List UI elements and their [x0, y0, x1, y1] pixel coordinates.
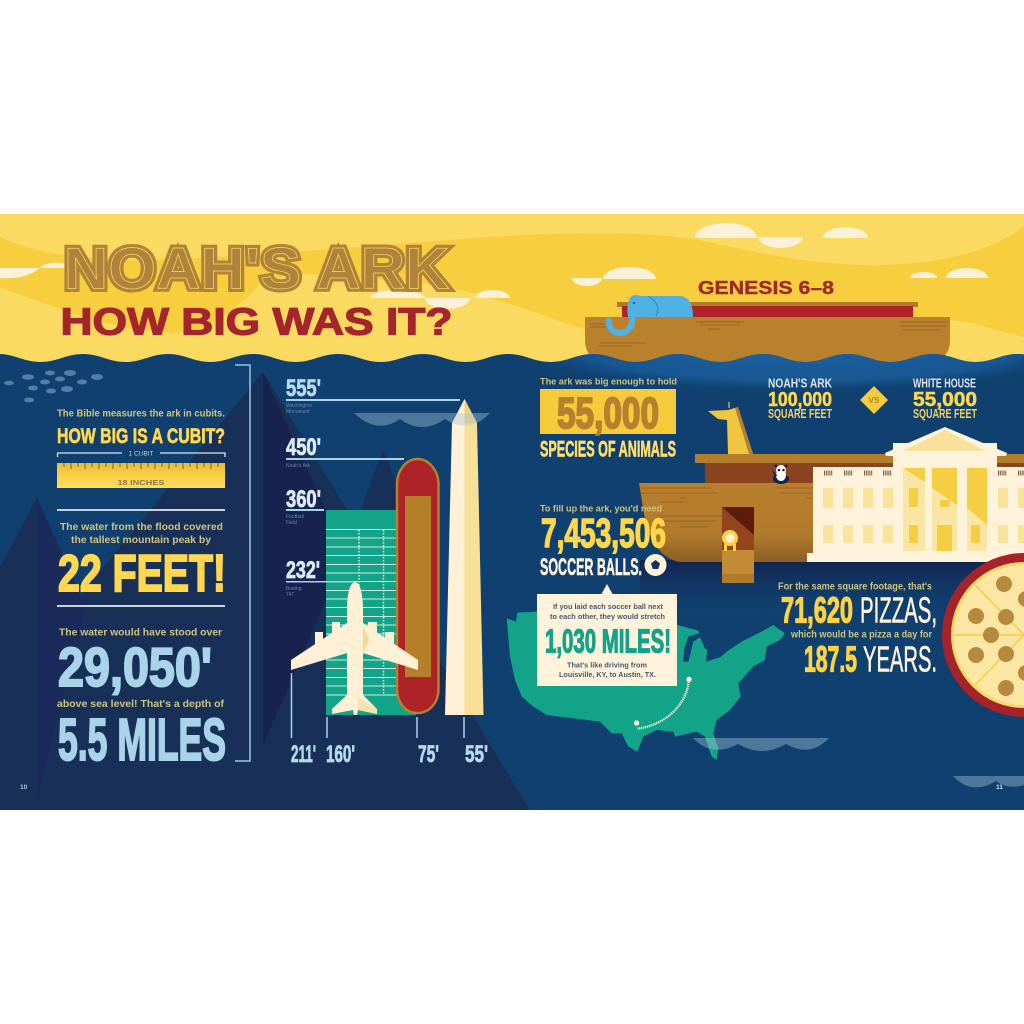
cloud near florida [693, 738, 829, 751]
undersea mountains [0, 372, 530, 810]
stat: pizzas: For the same square footage, that's [778, 582, 932, 592]
big number: 5.5 miles: 5.5 MILES [58, 707, 226, 773]
icon: giraffe [708, 402, 753, 454]
title: Noah's Ark: NOAH'S ARK [64, 236, 449, 301]
flood depth text: the tallest mountain peak by [71, 534, 211, 546]
stat: white house square feet: WHITE HOUSE [913, 376, 976, 390]
big number: 22 feet: 22 FEET! [58, 545, 226, 603]
measurement: 360 feet: Field [286, 520, 297, 526]
width labels: 55' [465, 741, 488, 768]
measurement: 232 feet: Boeing [286, 586, 302, 592]
flood depth text: The water from the flood covered [60, 521, 223, 533]
stat: 55,000 species: SPECIES OF ANIMALS [540, 436, 676, 462]
subtitle: How big was it?: HOW BIG WAS IT? [60, 302, 452, 344]
flood depth text [57, 509, 225, 546]
stat: noah's ark square feet: SQUARE FEET [768, 407, 832, 421]
measurement: 450 feet: 450' [286, 434, 321, 461]
icon: pizza [942, 553, 1024, 717]
stat: soccer balls [540, 504, 666, 581]
genesis reference: GENESIS 6–8 [698, 277, 834, 298]
stat: white house square feet [913, 376, 977, 421]
large ark shadow [640, 560, 1024, 620]
measurement: 360 feet: Football [286, 514, 304, 520]
cubit bracket: 1 CUBIT [129, 450, 153, 458]
measurement: 555 feet: 555' [286, 375, 321, 402]
measurement: 360 feet: 360' [286, 486, 321, 513]
stat: noah's ark square feet: 100,000 [768, 389, 832, 411]
chart: size comparison [286, 375, 490, 768]
ark top view [397, 459, 438, 713]
page number 11: 11 [996, 784, 1003, 791]
callout: 1,030 miles: Louisville, KY, to Austin, TX. [559, 670, 656, 679]
stat: noah's ark square feet [768, 376, 832, 421]
width labels: 75' [418, 741, 439, 768]
big number: 29,050 feet: 29,050' [58, 636, 212, 698]
measurement: 450 feet [286, 434, 404, 469]
icon: soccer ball [644, 554, 666, 576]
cubit bracket [58, 450, 225, 458]
bracket [235, 365, 250, 761]
stat: soccer balls: To fill up the ark, you'd need [540, 504, 662, 514]
stat: soccer balls: 7,453,506 [541, 510, 666, 556]
stat: pizzas: YEARS. [863, 638, 937, 680]
white house columns [903, 468, 987, 551]
icon: lion [722, 530, 738, 551]
callout: 1,030 miles: 1,030 MILES! [545, 622, 671, 660]
badge: versus: VS [869, 396, 880, 405]
callout: 1,030 miles: If you laid each soccer ball next [553, 602, 663, 611]
badge: versus [860, 386, 888, 414]
ark door [722, 507, 754, 550]
heading: how big is a cubit: HOW BIG IS A CUBIT? [57, 425, 225, 448]
white house [807, 427, 1024, 562]
map of the united states [507, 612, 785, 760]
measurement: 450 feet: Noah's Ark [286, 463, 311, 469]
ark on the horizon [585, 295, 950, 362]
sky background [0, 214, 1024, 374]
pin: Louisville [686, 677, 692, 682]
callout: 1,030 miles: That's like driving from [567, 660, 647, 670]
stat: pizzas: PIZZAS, [860, 590, 937, 630]
cloud over monument [354, 413, 490, 427]
stat: 55,000 species: 55,000 [557, 389, 659, 438]
airplane [291, 582, 418, 715]
title: Noah's Ark: NOAH'S ARK [64, 236, 449, 301]
stat: pizzas [778, 582, 937, 680]
route from Louisville to Austin [637, 682, 689, 729]
pin: Austin [634, 720, 639, 726]
stat: noah's ark square feet: NOAH'S ARK [768, 376, 832, 390]
width labels [291, 741, 488, 768]
stat: 55,000 species: The ark was big enough to hold [540, 376, 677, 388]
width labels: 211' [291, 741, 316, 768]
ark ramp [722, 550, 754, 583]
width labels: 160' [326, 741, 355, 768]
cloud bottom right [953, 776, 1024, 787]
panel: cubit facts [57, 408, 225, 488]
stat: pizzas: 71,620 [781, 590, 853, 630]
water [0, 354, 1024, 820]
stat: white house square feet: 55,000 [913, 389, 977, 411]
stat: soccer balls: SOCCER BALLS. [540, 554, 642, 581]
large ark [639, 402, 1024, 583]
page number 10: 10 [20, 784, 28, 791]
measurement: 232 feet: 747 [286, 592, 295, 598]
stat: white house square feet: SQUARE FEET [913, 407, 977, 421]
stat: 55,000 species [540, 376, 677, 462]
measurement: 360 feet [286, 486, 324, 526]
measurement: 555 feet: Monument [286, 409, 310, 415]
intro text: The Bible measures the ark in cubits. [57, 408, 225, 420]
stat: pizzas: which would be a pizza a day for [790, 630, 932, 640]
white house windows [823, 488, 1024, 543]
measurement: 232 feet [286, 557, 352, 598]
measurement: 555 feet [286, 375, 460, 415]
clouds [0, 223, 988, 309]
callout: 1,030 miles [537, 584, 677, 686]
measurement: 555 feet: Washington [286, 403, 312, 409]
school of fish [4, 370, 103, 402]
football field [326, 510, 416, 715]
width axis ticks [292, 673, 464, 738]
washington monument [445, 399, 484, 715]
icon: elephant [609, 295, 693, 333]
measurement: 232 feet: 232' [286, 557, 320, 584]
stat: pizzas: 187.5 [804, 638, 857, 680]
depth text: above sea level! That's a depth of [57, 698, 225, 710]
ruler [57, 463, 225, 488]
callout: 1,030 miles: to each other, they would stretch [550, 612, 665, 621]
sea level text: The water would have stood over [59, 626, 222, 638]
icon: panda [772, 464, 789, 484]
ruler: 18 INCHES [118, 478, 164, 487]
